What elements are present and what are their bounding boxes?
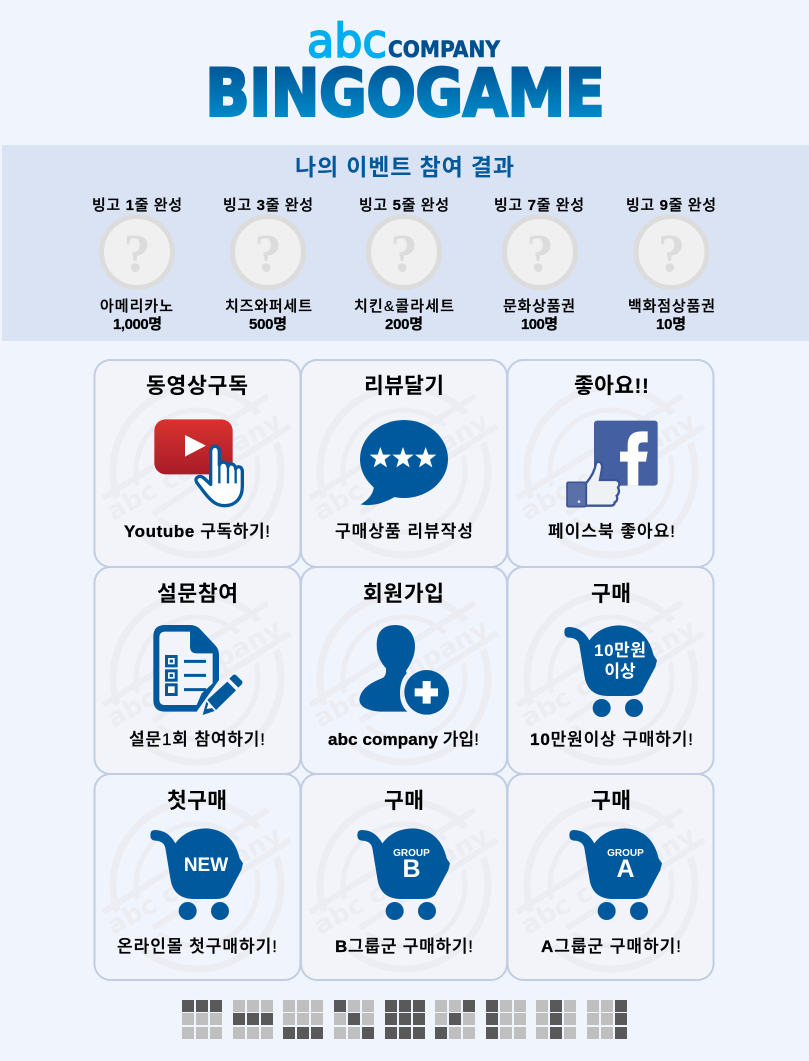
title: BINGOGAME: BINGOGAME xyxy=(206,56,604,132)
card: purchase over 100,000 won: 10만원이상 구매하기! xyxy=(530,730,693,749)
card: survey: 설문참여 xyxy=(157,582,238,606)
card: group A purchase xyxy=(508,774,714,980)
prize: bingo 5 lines xyxy=(354,197,454,333)
icon: cart group B: B xyxy=(402,855,421,883)
icon: cart 100,000 won: 이상 xyxy=(604,662,636,681)
card: first purchase: abc company xyxy=(102,820,286,940)
card: video subscribe: abc company xyxy=(102,406,286,526)
card: group B purchase: 구매 xyxy=(384,789,424,813)
prize: bingo 3 lines: ? xyxy=(254,223,282,283)
prize: bingo 7 lines: ? xyxy=(526,223,554,283)
card: first purchase: 첫구매 xyxy=(167,789,227,813)
pattern: bottom row xyxy=(283,1000,323,1039)
card: purchase over 100,000 won xyxy=(508,567,714,774)
card: join membership: abc company 가입! xyxy=(328,730,479,749)
bingo line pattern legend xyxy=(182,1000,627,1039)
icon: cart group A xyxy=(569,828,662,920)
card: first purchase xyxy=(94,774,300,980)
prize: bingo 7 lines: 문화상품권 xyxy=(503,298,575,315)
icon: survey document and pencil xyxy=(153,625,242,715)
card: group A purchase: A그룹군 구매하기! xyxy=(541,937,681,956)
prize: bingo 1 line: 1,000명 xyxy=(113,316,162,333)
card: like xyxy=(508,360,714,567)
card: write review: 리뷰달기 xyxy=(364,374,444,398)
prize: bingo 5 lines: 200명 xyxy=(385,316,423,333)
logo: abc company: COMPANY xyxy=(388,37,501,63)
card: like: 페이스북 좋아요! xyxy=(548,522,675,541)
card: like: abc company xyxy=(516,406,700,526)
card: purchase over 100,000 won: 구매 xyxy=(591,582,631,606)
prize: bingo 3 lines: 500명 xyxy=(249,316,287,333)
panel heading: 나의 이벤트 참여 결과 xyxy=(295,154,514,180)
icon: youtube play with pointing hand xyxy=(154,419,242,506)
prize: bingo 3 lines: 치즈와퍼세트 xyxy=(225,298,312,315)
icon: cart group A: GROUP xyxy=(607,848,644,859)
prize: bingo 5 lines: 빙고 5줄 완성 xyxy=(359,197,449,214)
prize: bingo 9 lines xyxy=(626,197,716,333)
pattern: top row xyxy=(182,1000,222,1039)
card: video subscribe: Youtube 구독하기! xyxy=(124,522,270,541)
logo: abc company: abc xyxy=(307,14,387,68)
card: group A purchase: abc company xyxy=(516,820,700,940)
prize: bingo 1 line: 빙고 1줄 완성 xyxy=(92,197,182,214)
icon: cart group A: A xyxy=(616,855,635,883)
card: first purchase: 온라인몰 첫구매하기! xyxy=(117,937,277,956)
prize: bingo 9 lines: ? xyxy=(658,223,685,283)
card: group B purchase xyxy=(301,774,507,980)
pattern: middle column xyxy=(536,1000,576,1039)
panel: bingo board xyxy=(94,360,714,980)
card: write review xyxy=(301,360,507,567)
prize: bingo 9 lines: 빙고 9줄 완성 xyxy=(626,197,716,214)
icon: speech bubble with stars xyxy=(360,420,448,505)
card: survey: 설문1회 참여하기! xyxy=(129,730,265,749)
prize: bingo 9 lines: 백화점상품권 xyxy=(628,298,715,315)
logo: abc company xyxy=(307,14,501,68)
card: purchase over 100,000 won: abc company xyxy=(516,613,700,733)
pattern: right column xyxy=(587,1000,627,1039)
prize: bingo 5 lines: 치킨&콜라세트 xyxy=(354,298,454,315)
card: survey: abc company xyxy=(102,613,286,733)
card: join membership: 회원가입 xyxy=(363,582,444,606)
card: group A purchase: 구매 xyxy=(591,789,631,813)
prize: bingo 5 lines: ? xyxy=(390,223,418,283)
panel: my event results xyxy=(2,145,809,341)
card: join membership xyxy=(301,567,507,774)
icon: cart group B: GROUP xyxy=(393,848,430,859)
prize: bingo 7 lines: 빙고 7줄 완성 xyxy=(494,197,584,214)
prize: bingo 3 lines xyxy=(223,197,313,333)
icon: user with plus xyxy=(359,625,449,715)
prize: bingo 1 line: ? xyxy=(124,223,150,283)
icon: cart NEW xyxy=(150,828,243,920)
card: video subscribe: 동영상구독 xyxy=(146,374,248,398)
card: write review: 구매상품 리뷰작성 xyxy=(335,522,473,541)
prize: bingo 9 lines: 10명 xyxy=(656,316,686,333)
prize: bingo 1 line: 아메리카노 xyxy=(100,298,173,315)
icon: cart group B xyxy=(357,828,450,920)
card: join membership: abc company xyxy=(309,613,493,733)
card: group B purchase: B그룹군 구매하기! xyxy=(335,937,473,956)
prize: bingo 3 lines: 빙고 3줄 완성 xyxy=(223,197,313,214)
pattern: middle row xyxy=(233,1000,273,1039)
card: write review: abc company xyxy=(309,406,493,526)
icon: facebook thumbs up xyxy=(567,421,658,507)
icon: cart NEW: NEW xyxy=(184,855,228,876)
card: group B purchase: abc company xyxy=(309,820,493,940)
prize: bingo 7 lines: 100명 xyxy=(521,316,558,333)
pattern: diagonal down xyxy=(334,1000,374,1039)
prize: bingo 7 lines xyxy=(494,197,584,333)
icon: cart 100,000 won xyxy=(564,625,657,717)
prize: bingo 1 line xyxy=(92,197,182,333)
card: video subscribe xyxy=(94,360,300,567)
icon: cart 100,000 won: 10만원 xyxy=(594,641,646,660)
pattern: full xyxy=(385,1000,425,1039)
pattern: left column xyxy=(486,1000,526,1039)
card: survey xyxy=(94,567,300,774)
pattern: diagonal up xyxy=(435,1000,475,1039)
card: like: 좋아요!! xyxy=(574,374,649,398)
